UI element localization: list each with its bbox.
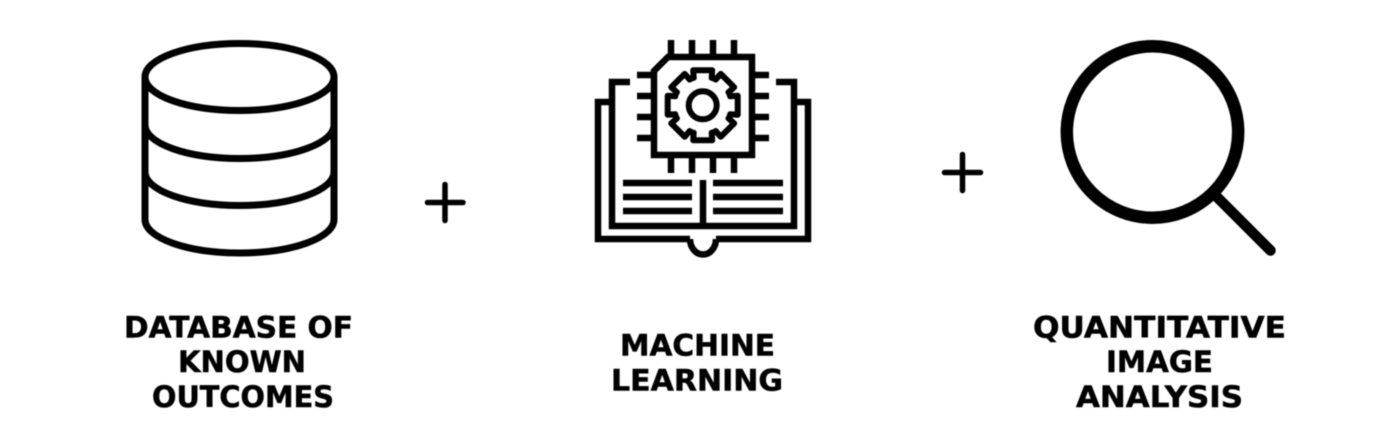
book spine — [700, 180, 706, 226]
icon: machine learning book and chip — [598, 40, 808, 254]
right page text lines — [713, 183, 783, 211]
label: database of known outcomes: DATABASE OF — [124, 310, 353, 344]
label: machine learning — [611, 328, 783, 398]
label: quantitative image analysis — [1033, 310, 1286, 414]
label: quantitative image analysis: IMAGE — [1106, 345, 1213, 379]
label: quantitative image analysis: QUANTITATIVE — [1033, 310, 1286, 344]
label: quantitative image analysis: ANALYSIS — [1076, 380, 1243, 414]
label: machine learning: MACHINE — [620, 328, 775, 362]
icon: plus sign one — [428, 184, 463, 220]
label: database of known outcomes: KNOWN — [178, 345, 306, 379]
label: machine learning: LEARNING — [611, 364, 783, 398]
icon: plus sign two — [944, 154, 980, 190]
label: database of known outcomes: OUTCOMES — [152, 380, 334, 414]
left page text lines — [623, 183, 692, 211]
icon: database cylinder — [145, 44, 334, 253]
chip body — [654, 57, 752, 155]
chip pins — [637, 40, 769, 173]
gear — [668, 70, 738, 140]
book outer cover — [598, 102, 808, 239]
book spine tab — [690, 239, 716, 254]
book inner pages — [612, 82, 794, 226]
label: database of known outcomes — [124, 310, 353, 414]
icon: magnifying glass — [1067, 46, 1270, 250]
